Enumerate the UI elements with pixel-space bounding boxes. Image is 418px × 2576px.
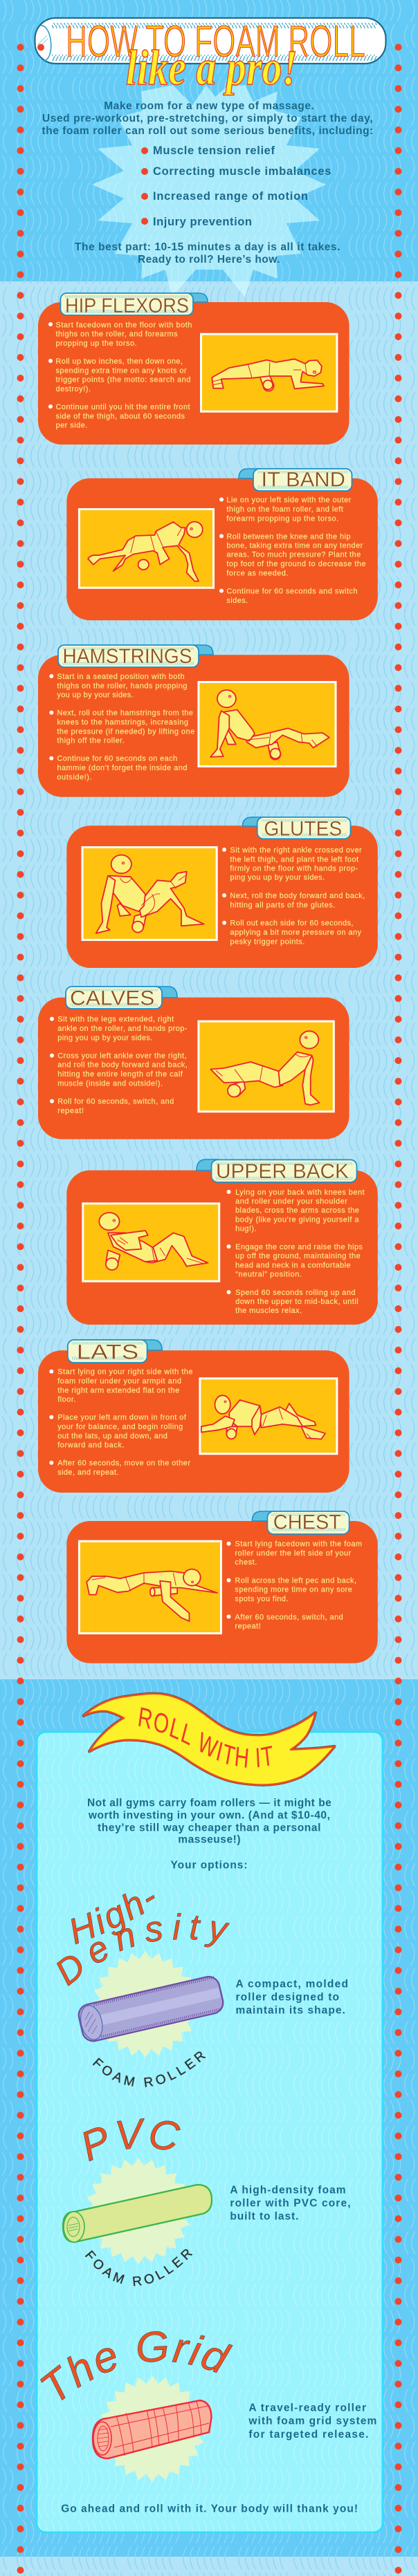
instructions: Roll for 60 seconds, switch, and bbox=[57, 1098, 174, 1106]
instructions: applying a bit more pressure on any bbox=[230, 928, 361, 937]
wave pattern lower band bbox=[0, 1679, 418, 2557]
panel intro text: Your options: bbox=[170, 1859, 248, 1871]
instructions: Start facedown on the floor with both bbox=[55, 321, 192, 329]
subtitle: like a pro: like a pro! bbox=[126, 40, 298, 95]
tag: hamstrings: HAMSTRINGS bbox=[62, 645, 192, 668]
banner: roll with it: ROLL WITH IT bbox=[138, 1707, 273, 1768]
instructions: ping you up by your sides. bbox=[230, 874, 325, 882]
illustration: lats bbox=[200, 1379, 337, 1454]
best part text: The best part: 10-15 minutes a day is all it takes. bbox=[75, 241, 340, 253]
tag: lats bbox=[68, 1340, 162, 1363]
instructions: Start lying facedown with the foam bbox=[235, 1540, 362, 1549]
instructions: After 60 seconds, switch, and bbox=[235, 1613, 343, 1621]
intro starburst bbox=[92, 85, 326, 297]
description bbox=[230, 2185, 350, 2223]
instructions: side of the thigh, about 60 seconds bbox=[55, 412, 185, 420]
panel: hamstrings bbox=[38, 645, 349, 797]
instructions: hitting all parts of the glutes. bbox=[230, 901, 335, 909]
instructions: floor. bbox=[57, 1396, 75, 1404]
instructions: Sit with the right ankle crossed over bbox=[230, 846, 362, 855]
instructions: propping up the torso. bbox=[55, 339, 137, 348]
instructions: hitting the entire length of the calf bbox=[57, 1070, 183, 1079]
instructions: Roll up two inches, then down one, bbox=[55, 357, 183, 366]
instructions: bone, taking extra time on any tender bbox=[226, 542, 363, 550]
panel intro text: they’re still way cheaper than a personal bbox=[98, 1822, 320, 1833]
panel intro text: worth investing in your own. (And at $10-40, bbox=[88, 1809, 330, 1821]
tag: upper back: UPPER BACK bbox=[216, 1160, 349, 1183]
description: A high-density foam bbox=[230, 2185, 346, 2196]
instructions: head and neck in a comfortable bbox=[235, 1261, 351, 1269]
panel: lats bbox=[38, 1340, 349, 1493]
intro text: Make room for a new type of massage. bbox=[104, 100, 314, 112]
closing line: Go ahead and roll with it. Your body will thank you! bbox=[61, 2503, 358, 2515]
panel intro text: masseuse!) bbox=[178, 1834, 241, 1846]
left dotted border bbox=[17, 41, 25, 2576]
instructions: roller under the left side of your bbox=[235, 1549, 352, 1558]
instructions: Roll out each side for 60 seconds, bbox=[230, 920, 353, 928]
panel intro text: Not all gyms carry foam rollers — it might be bbox=[87, 1797, 331, 1809]
panel: glutes bbox=[66, 817, 378, 968]
instructions: knees to the hamstrings, increasing bbox=[57, 718, 188, 727]
lettering: high-density: Density bbox=[57, 1913, 230, 1986]
label: foam roller: FOAM ROLLER bbox=[93, 2051, 206, 2087]
benefits list: Correcting muscle imbalances bbox=[153, 165, 331, 178]
instructions: spending more time on any sore bbox=[235, 1586, 352, 1594]
instructions: firmly on the floor with hands prop- bbox=[230, 864, 358, 872]
instructions: muscle (inside and outside!). bbox=[57, 1079, 163, 1088]
description bbox=[248, 2402, 376, 2440]
option: pvc foam roller bbox=[62, 2118, 350, 2286]
benefits list: Muscle tension relief bbox=[153, 144, 275, 157]
instructions: out the lats, up and down, and bbox=[57, 1432, 167, 1440]
instructions bbox=[219, 496, 365, 605]
instructions: ping you up by your sides. bbox=[57, 1034, 152, 1042]
instructions: repeat! bbox=[235, 1623, 261, 1631]
purple roller bbox=[77, 1975, 225, 2043]
instructions: spending extra time on any knots or bbox=[55, 366, 187, 375]
instructions: body (like you’re giving yourself a bbox=[235, 1215, 359, 1224]
starburst bbox=[99, 2376, 206, 2482]
instructions: down the upper to mid-back, until bbox=[235, 1298, 358, 1306]
panel: chest bbox=[66, 1511, 378, 1663]
description: with foam grid system bbox=[248, 2416, 376, 2427]
instructions: force as needed. bbox=[226, 569, 288, 577]
instructions: and roll the body forward and back, bbox=[57, 1061, 188, 1070]
instructions: thigh on the foam roller, and left bbox=[226, 505, 343, 514]
benefits list: Increased range of motion bbox=[153, 190, 308, 203]
instructions: Continue for 60 seconds on each bbox=[57, 755, 177, 763]
instructions: Cross your left ankle over the right, bbox=[57, 1052, 187, 1061]
instructions: the left thigh, and plant the left foot bbox=[230, 855, 358, 864]
background: light blue band bbox=[0, 281, 418, 1679]
wave pattern light band bbox=[0, 281, 418, 1679]
instructions: side, and repeat. bbox=[57, 1468, 118, 1477]
lettering: the grid: The Grid bbox=[40, 2331, 233, 2400]
instructions: “neutral” position. bbox=[235, 1271, 302, 1279]
lettering: pvc: PVC bbox=[83, 2118, 181, 2161]
description: A compact, molded bbox=[235, 1978, 348, 1990]
panel: hip flexors bbox=[38, 293, 349, 445]
instructions bbox=[227, 1188, 365, 1315]
description: built to last. bbox=[230, 2211, 298, 2223]
illustration: it band bbox=[79, 509, 214, 588]
illustration: chest bbox=[79, 1541, 221, 1633]
benefits list bbox=[141, 144, 331, 228]
background: lower blue band bbox=[0, 1679, 418, 2557]
wave pattern bottom strip bbox=[0, 2557, 418, 2576]
panel: upper back bbox=[66, 1159, 378, 1325]
description: roller with PVC core, bbox=[230, 2198, 350, 2210]
intro text bbox=[42, 100, 373, 137]
background: top blue band bbox=[0, 0, 418, 281]
instructions: the right arm extended flat on the bbox=[57, 1386, 179, 1394]
instructions: up off the ground, maintaining the bbox=[235, 1252, 361, 1260]
starburst bbox=[92, 1951, 199, 2057]
instructions: Lie on your left side with the outer bbox=[226, 496, 352, 505]
instructions: hug!). bbox=[235, 1225, 257, 1233]
instructions: top foot of the ground to decrease the bbox=[226, 560, 365, 568]
instructions: Sit with the legs extended, right bbox=[57, 1016, 174, 1024]
best part text: Ready to roll? Here’s how. bbox=[138, 254, 280, 265]
description bbox=[235, 1978, 348, 2017]
instructions: hammie (don’t forget the inside and bbox=[57, 764, 187, 772]
right dotted border bbox=[394, 41, 403, 2576]
tag: it band: IT BAND bbox=[262, 468, 345, 491]
instructions bbox=[50, 1016, 188, 1115]
illustration: hip flexors bbox=[201, 334, 337, 411]
instructions: thigh off the roller. bbox=[57, 736, 125, 745]
instructions: outside!). bbox=[57, 773, 91, 781]
illustration: glutes bbox=[82, 848, 217, 940]
instructions: Next, roll out the hamstrings from the bbox=[57, 709, 193, 718]
illustration: hamstrings bbox=[199, 682, 336, 766]
instructions: Continue for 60 seconds and switch bbox=[226, 588, 358, 596]
intro text: the foam roller can roll out some serious benefits, including: bbox=[42, 125, 373, 137]
instructions: foam roller under your armpit and bbox=[57, 1377, 181, 1385]
background: bottom light strip bbox=[0, 2557, 418, 2576]
instructions: After 60 seconds, move on the other bbox=[57, 1459, 190, 1468]
description: maintain its shape. bbox=[235, 2005, 345, 2017]
illustration: calves bbox=[199, 1021, 334, 1112]
description: roller designed to bbox=[235, 1992, 339, 2004]
tag: lats: LATS bbox=[77, 1341, 138, 1363]
instructions: Continue until you hit the entire front bbox=[55, 403, 190, 411]
instructions: repeat! bbox=[57, 1107, 84, 1115]
wave pattern top band bbox=[0, 0, 418, 281]
banner: roll with it bbox=[82, 1692, 336, 1786]
title roller bbox=[35, 18, 386, 64]
tag: hip flexors: HIP FLEXORS bbox=[65, 295, 189, 317]
panel: calves bbox=[38, 987, 349, 1139]
red grid roller bbox=[93, 2400, 212, 2458]
instructions bbox=[49, 673, 194, 781]
instructions: Lying on your back with knees bent bbox=[235, 1188, 365, 1197]
instructions: Roll across the left pec and back, bbox=[235, 1577, 356, 1585]
intro text: Used pre-workout, pre-stretching, or simply to start the day, bbox=[42, 113, 373, 124]
instructions: thighs on the roller, hands propping bbox=[57, 682, 187, 690]
tag: calves: CALVES bbox=[70, 987, 154, 1009]
starburst bbox=[85, 2158, 192, 2264]
instructions: you up by your sides. bbox=[57, 691, 134, 700]
instructions bbox=[222, 846, 365, 946]
instructions: spots you find. bbox=[235, 1595, 288, 1603]
illustration: upper back bbox=[83, 1204, 219, 1281]
instructions: Start lying on your right side with the bbox=[57, 1368, 192, 1376]
instructions: per side. bbox=[55, 422, 87, 430]
green roller bbox=[63, 2185, 212, 2242]
panel: it band bbox=[66, 468, 378, 620]
instructions: areas. Too much pressure? Plant the bbox=[226, 551, 361, 559]
option: high-density foam roller bbox=[57, 1893, 348, 2087]
instructions bbox=[227, 1540, 362, 1631]
instructions: Place your left arm down in front of bbox=[57, 1414, 187, 1422]
description: A travel-ready roller bbox=[248, 2402, 366, 2414]
instructions: destroy!). bbox=[55, 385, 91, 393]
instructions: thighs on the roller, and forearms bbox=[55, 330, 178, 339]
instructions: Engage the core and raise the hips bbox=[235, 1243, 363, 1251]
option: the grid bbox=[40, 2331, 376, 2482]
instructions: Spend 60 seconds rolling up and bbox=[235, 1289, 356, 1297]
instructions: sides. bbox=[226, 597, 248, 605]
tag: chest: CHEST bbox=[273, 1511, 341, 1534]
benefits list: Injury prevention bbox=[153, 216, 252, 228]
instructions: your for balance, and begin rolling bbox=[57, 1423, 183, 1431]
instructions: Roll between the knee and the hip bbox=[226, 533, 350, 541]
instructions: chest. bbox=[235, 1558, 257, 1567]
lettering: high-density: High- bbox=[71, 1893, 155, 1944]
instructions: Next, roll the body forward and back, bbox=[230, 892, 365, 900]
instructions: and roller under your shoulder bbox=[235, 1197, 347, 1206]
instructions: ankle on the roller, and hands prop- bbox=[57, 1025, 188, 1033]
label: foam roller: FOAM ROLLER bbox=[84, 2249, 192, 2286]
instructions: blades, cross the arms across the bbox=[235, 1206, 359, 1215]
panel intro text bbox=[87, 1797, 331, 1871]
instructions: forward and back. bbox=[57, 1441, 125, 1449]
instructions: forearm propping up the torso. bbox=[226, 514, 338, 523]
best part text bbox=[75, 241, 340, 265]
instructions bbox=[48, 321, 192, 430]
panel: roll with it bbox=[37, 1732, 383, 2532]
instructions: pesky trigger points. bbox=[230, 937, 305, 946]
instructions: Start in a seated position with both bbox=[57, 673, 185, 681]
wave pattern inside panel bbox=[37, 1733, 382, 2532]
instructions: the pressure (if needed) by lifting one bbox=[57, 727, 194, 736]
tag: glutes: GLUTES bbox=[264, 817, 342, 840]
description: for targeted release. bbox=[248, 2429, 368, 2440]
instructions: the muscles relax. bbox=[235, 1307, 302, 1315]
instructions bbox=[49, 1368, 192, 1477]
instructions: trigger points (the motto: search and bbox=[55, 376, 190, 384]
